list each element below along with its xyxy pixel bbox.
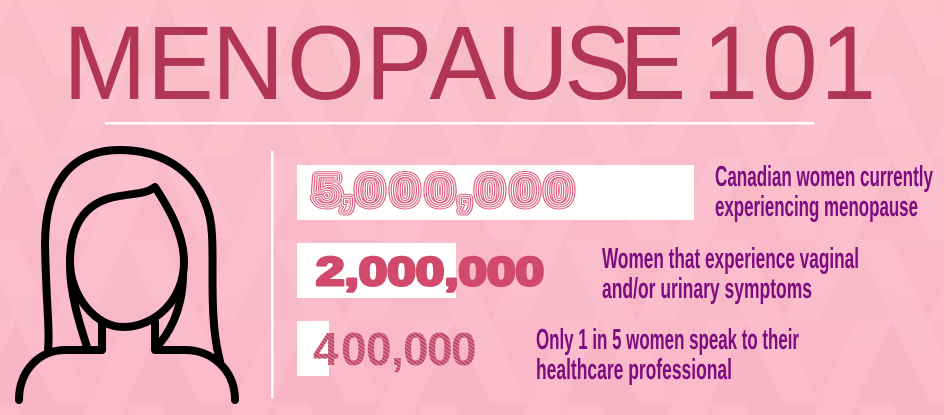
- number: 2,000,000: 2,000,000: [316, 250, 544, 294]
- number: 400,000: 400,000: [313, 323, 477, 375]
- caption: vaginal and urinary symptoms: [602, 243, 859, 305]
- title: MENOPAUSE 101: [63, 4, 876, 122]
- caption: Canadian women: [715, 161, 933, 223]
- number: 5,000,000: 5,000,000: [314, 166, 572, 214]
- caption: healthcare professional: healthcare professional: [536, 354, 732, 386]
- stat row: 2,000,000: [297, 243, 859, 305]
- icon: woman with shoulder-length hair: [19, 150, 235, 400]
- bar: 5,000,000: [297, 165, 694, 220]
- number: 5,000,000: 5,000,000: [314, 166, 572, 214]
- number: 5,000,000: 5,000,000: [314, 166, 572, 214]
- stat row: 5,000,000: [297, 161, 933, 223]
- stat row: 400,000: [297, 321, 799, 386]
- number: 5,000,000: 5,000,000: [314, 166, 572, 214]
- number: 5,000,000: 5,000,000: [314, 166, 572, 214]
- bar: 2,000,000: [297, 243, 456, 298]
- caption: vaginal and urinary symptoms: and/or urinary symptoms: [602, 273, 812, 305]
- caption: healthcare professional: [536, 324, 799, 386]
- bar: 400,000: [297, 321, 329, 376]
